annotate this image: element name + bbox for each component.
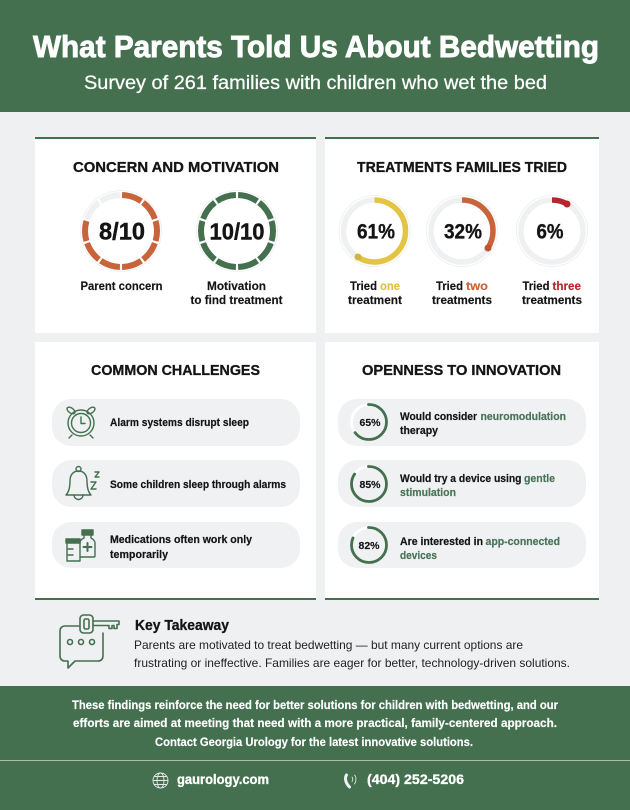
item: sleep through alarms (52, 460, 300, 507)
panel: treatments families tried (325, 137, 599, 333)
icon: key and speech bubble (60, 615, 119, 668)
item: app-connected devices: devices (400, 550, 437, 562)
gauge: 61 percent (339, 196, 410, 266)
heading: key takeaway: Key Takeaway (135, 617, 230, 634)
label: tried one treatment: Tried (350, 279, 377, 293)
text: closing statement: efforts are aimed at meeting that need with a more practical, family-centered approach. (73, 718, 557, 730)
website: gaurology.com (177, 771, 269, 787)
phone number: (404) 252-5206 (367, 771, 464, 787)
label: motivation to find treatment: Motivation (207, 279, 266, 293)
label: parent concern: Parent concern (80, 279, 162, 293)
text: takeaway body: Parents are motivated to treat bedwetting — but many current options are (134, 638, 523, 652)
label: tried two treatments (432, 279, 492, 307)
item: app-connected devices: app-connected (486, 536, 560, 548)
icon: phone (346, 775, 356, 787)
panel: concern and motivation (35, 137, 316, 333)
text: closing statement: Contact Georgia Urology for the latest innovative solutions. (155, 737, 473, 749)
text: closing statement: These findings reinforce the need for better solutions for children with bedwetting, and our (72, 700, 559, 712)
subtitle: Survey of 261 families with children who wet the bed (84, 73, 547, 94)
icon: bell with z (66, 466, 99, 500)
item: neuromodulation (338, 399, 586, 446)
item: neuromodulation: Would consider (400, 411, 478, 423)
icon: alarm clock (66, 406, 96, 438)
gauge: parent concern 8/10: 8/10 (99, 218, 145, 246)
gauge: 6 percent: 6% (536, 220, 564, 244)
icon: globe (153, 773, 168, 788)
footer (0, 686, 630, 810)
title: What Parents Told Us About Bedwetting (33, 29, 599, 64)
label: tried three treatments (522, 279, 582, 307)
label: tried three treatments: Tried (522, 279, 550, 293)
item: alarm systems: Alarm systems disrupt sleep (110, 417, 249, 429)
gauge: 32 percent: 32% (444, 220, 482, 244)
item: gentle stimulation (338, 460, 586, 507)
label: tried two treatments: treatments (432, 293, 492, 307)
text: takeaway body: frustrating or ineffective. Families are eager for better, technology-driven solutions. (134, 656, 570, 670)
label: motivation to find treatment: to find treatment (190, 293, 282, 307)
gauge: 82 percent (352, 528, 386, 562)
gauge: parent concern 8/10 (80, 190, 162, 272)
gauge: 85 percent: 85% (360, 479, 381, 491)
gauge: 6 percent (516, 196, 588, 266)
gauge: 85 percent (352, 466, 386, 502)
text: takeaway body (134, 638, 570, 670)
item: sleep through alarms: Some children sleep through alarms (110, 479, 286, 491)
gauge: 82 percent: 82% (358, 540, 380, 552)
gauge: 32 percent (426, 196, 498, 266)
text: closing statement (72, 700, 559, 749)
icon: medicine bottles (66, 530, 95, 561)
label: tried two treatments: two (466, 279, 488, 293)
panel: openness to innovation (325, 342, 599, 600)
label: tried one treatment (348, 279, 402, 307)
label: tried two treatments: Tried (436, 279, 463, 293)
heading: concern and motivation: CONCERN AND MOTIVATION (73, 160, 279, 176)
gauge: 65 percent (352, 404, 386, 440)
item: medications: temporarily (110, 549, 169, 561)
label: tried three treatments: treatments (522, 293, 582, 307)
item: alarm systems (52, 399, 300, 446)
item: gentle stimulation: gentle (524, 473, 555, 485)
item: app-connected devices: Are interested in (400, 536, 483, 548)
label: motivation to find treatment (190, 279, 282, 307)
key takeaway section (60, 615, 570, 670)
item: medications (52, 522, 300, 568)
heading: common challenges: COMMON CHALLENGES (91, 363, 260, 379)
label: tried three treatments: three (552, 279, 581, 293)
header banner (0, 0, 630, 112)
gauge: motivation 10/10: 10/10 (210, 218, 264, 244)
panel: common challenges (35, 342, 316, 600)
gauge: 61 percent: 61% (357, 220, 395, 244)
item: gentle stimulation: Would try a device using (400, 473, 522, 485)
gauge: motivation 10/10 (196, 190, 278, 272)
item: app-connected devices (338, 522, 586, 568)
label: tried one treatment: treatment (348, 293, 402, 307)
heading: treatments families tried: TREATMENTS FAMILIES TRIED (357, 160, 567, 176)
heading: openness to innovation: OPENNESS TO INNOVATION (362, 363, 561, 379)
label: tried one treatment: one (380, 279, 400, 293)
item: neuromodulation: neuromodulation (480, 411, 566, 423)
item: gentle stimulation: stimulation (400, 487, 456, 499)
item: medications: Medications often work only (110, 534, 253, 546)
item: neuromodulation: therapy (400, 425, 439, 437)
gauge: 65 percent: 65% (360, 417, 381, 429)
